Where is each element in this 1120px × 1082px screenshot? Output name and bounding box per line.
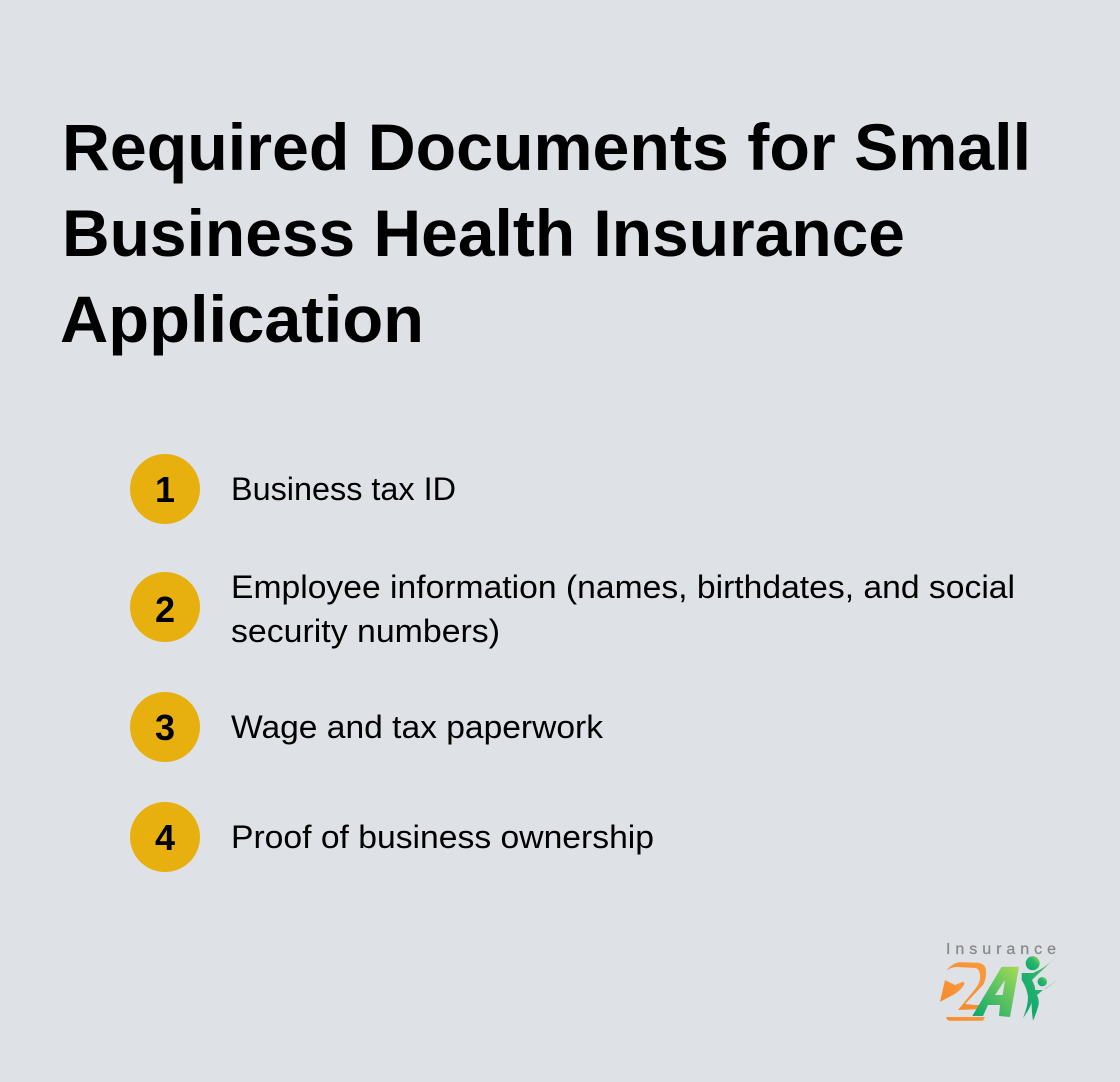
title bbox=[60, 110, 1031, 356]
list item 3: 3 bbox=[155, 707, 175, 748]
list item 1: 1 bbox=[155, 469, 175, 510]
title: Business Health Insurance bbox=[62, 196, 905, 270]
list item 2: Employee information (names, birthdates, and social bbox=[231, 569, 1015, 605]
list item 2: 2 bbox=[155, 589, 175, 630]
logo: Insurance 2A: Insurance bbox=[946, 941, 1056, 958]
title: Required Documents for Small bbox=[62, 110, 1031, 184]
list item 4: 4 bbox=[155, 817, 175, 858]
list item 1: Business tax ID bbox=[231, 471, 456, 507]
list item 2: security numbers) bbox=[231, 613, 500, 649]
list item 4 bbox=[130, 802, 654, 872]
list item 1 bbox=[130, 454, 456, 524]
logo: Insurance 2A bbox=[940, 941, 1058, 1021]
list item 3: Wage and tax paperwork bbox=[231, 709, 604, 745]
list item 2 bbox=[130, 569, 1015, 649]
list item 4: Proof of business ownership bbox=[231, 819, 654, 855]
list item 3 bbox=[130, 692, 604, 762]
title: Application bbox=[60, 282, 424, 356]
